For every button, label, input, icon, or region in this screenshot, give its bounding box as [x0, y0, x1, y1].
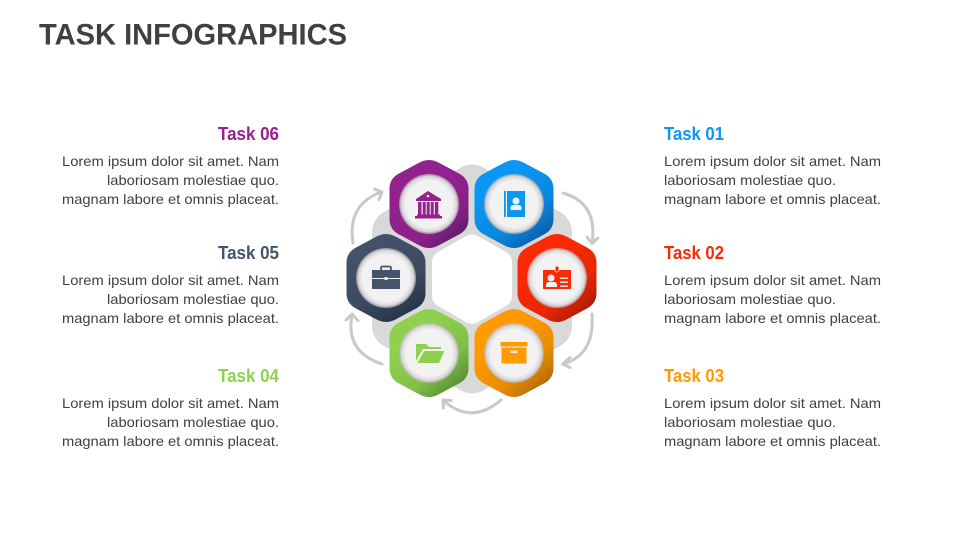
icon: briefcase — [372, 266, 400, 289]
icon: folder — [416, 344, 444, 363]
text block: Task 03: laboriosam molestiae quo. — [664, 414, 836, 430]
text block: Task 04: Lorem ipsum dolor sit amet. Nam — [62, 395, 279, 411]
hexagon: Task 04 green — [390, 309, 468, 397]
text block: Task 03: magnam labore et omnis placeat. — [664, 433, 881, 449]
hexagon: Task 01 blue — [474, 160, 554, 248]
text block: Task 02: Lorem ipsum dolor sit amet. Nam — [664, 272, 881, 288]
text block: Task 01: Lorem ipsum dolor sit amet. Nam — [664, 153, 881, 169]
text block: Task 05: laboriosam molestiae quo. — [107, 291, 279, 307]
text block: Task 01 — [664, 124, 881, 207]
arrow: red to orange — [562, 314, 592, 368]
text block: Task 02: magnam labore et omnis placeat. — [664, 310, 881, 326]
text block: Task 04: laboriosam molestiae quo. — [107, 414, 279, 430]
text block: Task 04: magnam labore et omnis placeat. — [62, 433, 279, 449]
hexagon: Task 06 purple — [390, 160, 468, 248]
hexagon: Task 05 navy — [346, 234, 426, 322]
hexagon: Task 02 red — [518, 234, 596, 322]
text block: Task 06: laboriosam molestiae quo. — [107, 172, 279, 188]
text block: Task 01: magnam labore et omnis placeat. — [664, 191, 881, 207]
text block: Task 05: Task 05 — [218, 243, 279, 263]
text block: Task 05: magnam labore et omnis placeat. — [62, 310, 279, 326]
text block: Task 02: laboriosam molestiae quo. — [664, 291, 836, 307]
text block: Task 03: Task 03 — [664, 366, 724, 386]
text block: Task 01: Task 01 — [664, 124, 724, 144]
text block: Task 06: Lorem ipsum dolor sit amet. Nam — [62, 153, 279, 169]
hexagon: Task 03 orange — [474, 309, 554, 397]
icon: bank — [415, 191, 442, 218]
text block: Task 02: Task 02 — [664, 243, 724, 263]
arrow: orange to green — [443, 400, 501, 413]
text block: Task 06 — [62, 124, 279, 207]
text block: Task 02 — [664, 243, 881, 326]
arrow: blue to red — [563, 193, 598, 244]
text block: Task 05: Lorem ipsum dolor sit amet. Nam — [62, 272, 279, 288]
text block: Task 01: laboriosam molestiae quo. — [664, 172, 836, 188]
text block: Task 06: Task 06 — [218, 124, 279, 144]
icon: address book — [504, 191, 525, 217]
icon: archive box — [500, 342, 528, 364]
text block: Task 04 — [62, 366, 279, 449]
icon: id badge — [543, 266, 571, 289]
grey hexagon ring — [372, 164, 572, 394]
text block: Task 04: Task 04 — [218, 366, 279, 386]
text block: Task 03 — [664, 366, 881, 449]
title: TASK INFOGRAPHICS — [39, 18, 347, 52]
text block: Task 06: magnam labore et omnis placeat. — [62, 191, 279, 207]
arrow: navy to purple — [352, 189, 382, 243]
text block: Task 03: Lorem ipsum dolor sit amet. Nam — [664, 395, 881, 411]
text block: Task 05 — [62, 243, 279, 326]
arrow: green to navy — [346, 314, 382, 364]
